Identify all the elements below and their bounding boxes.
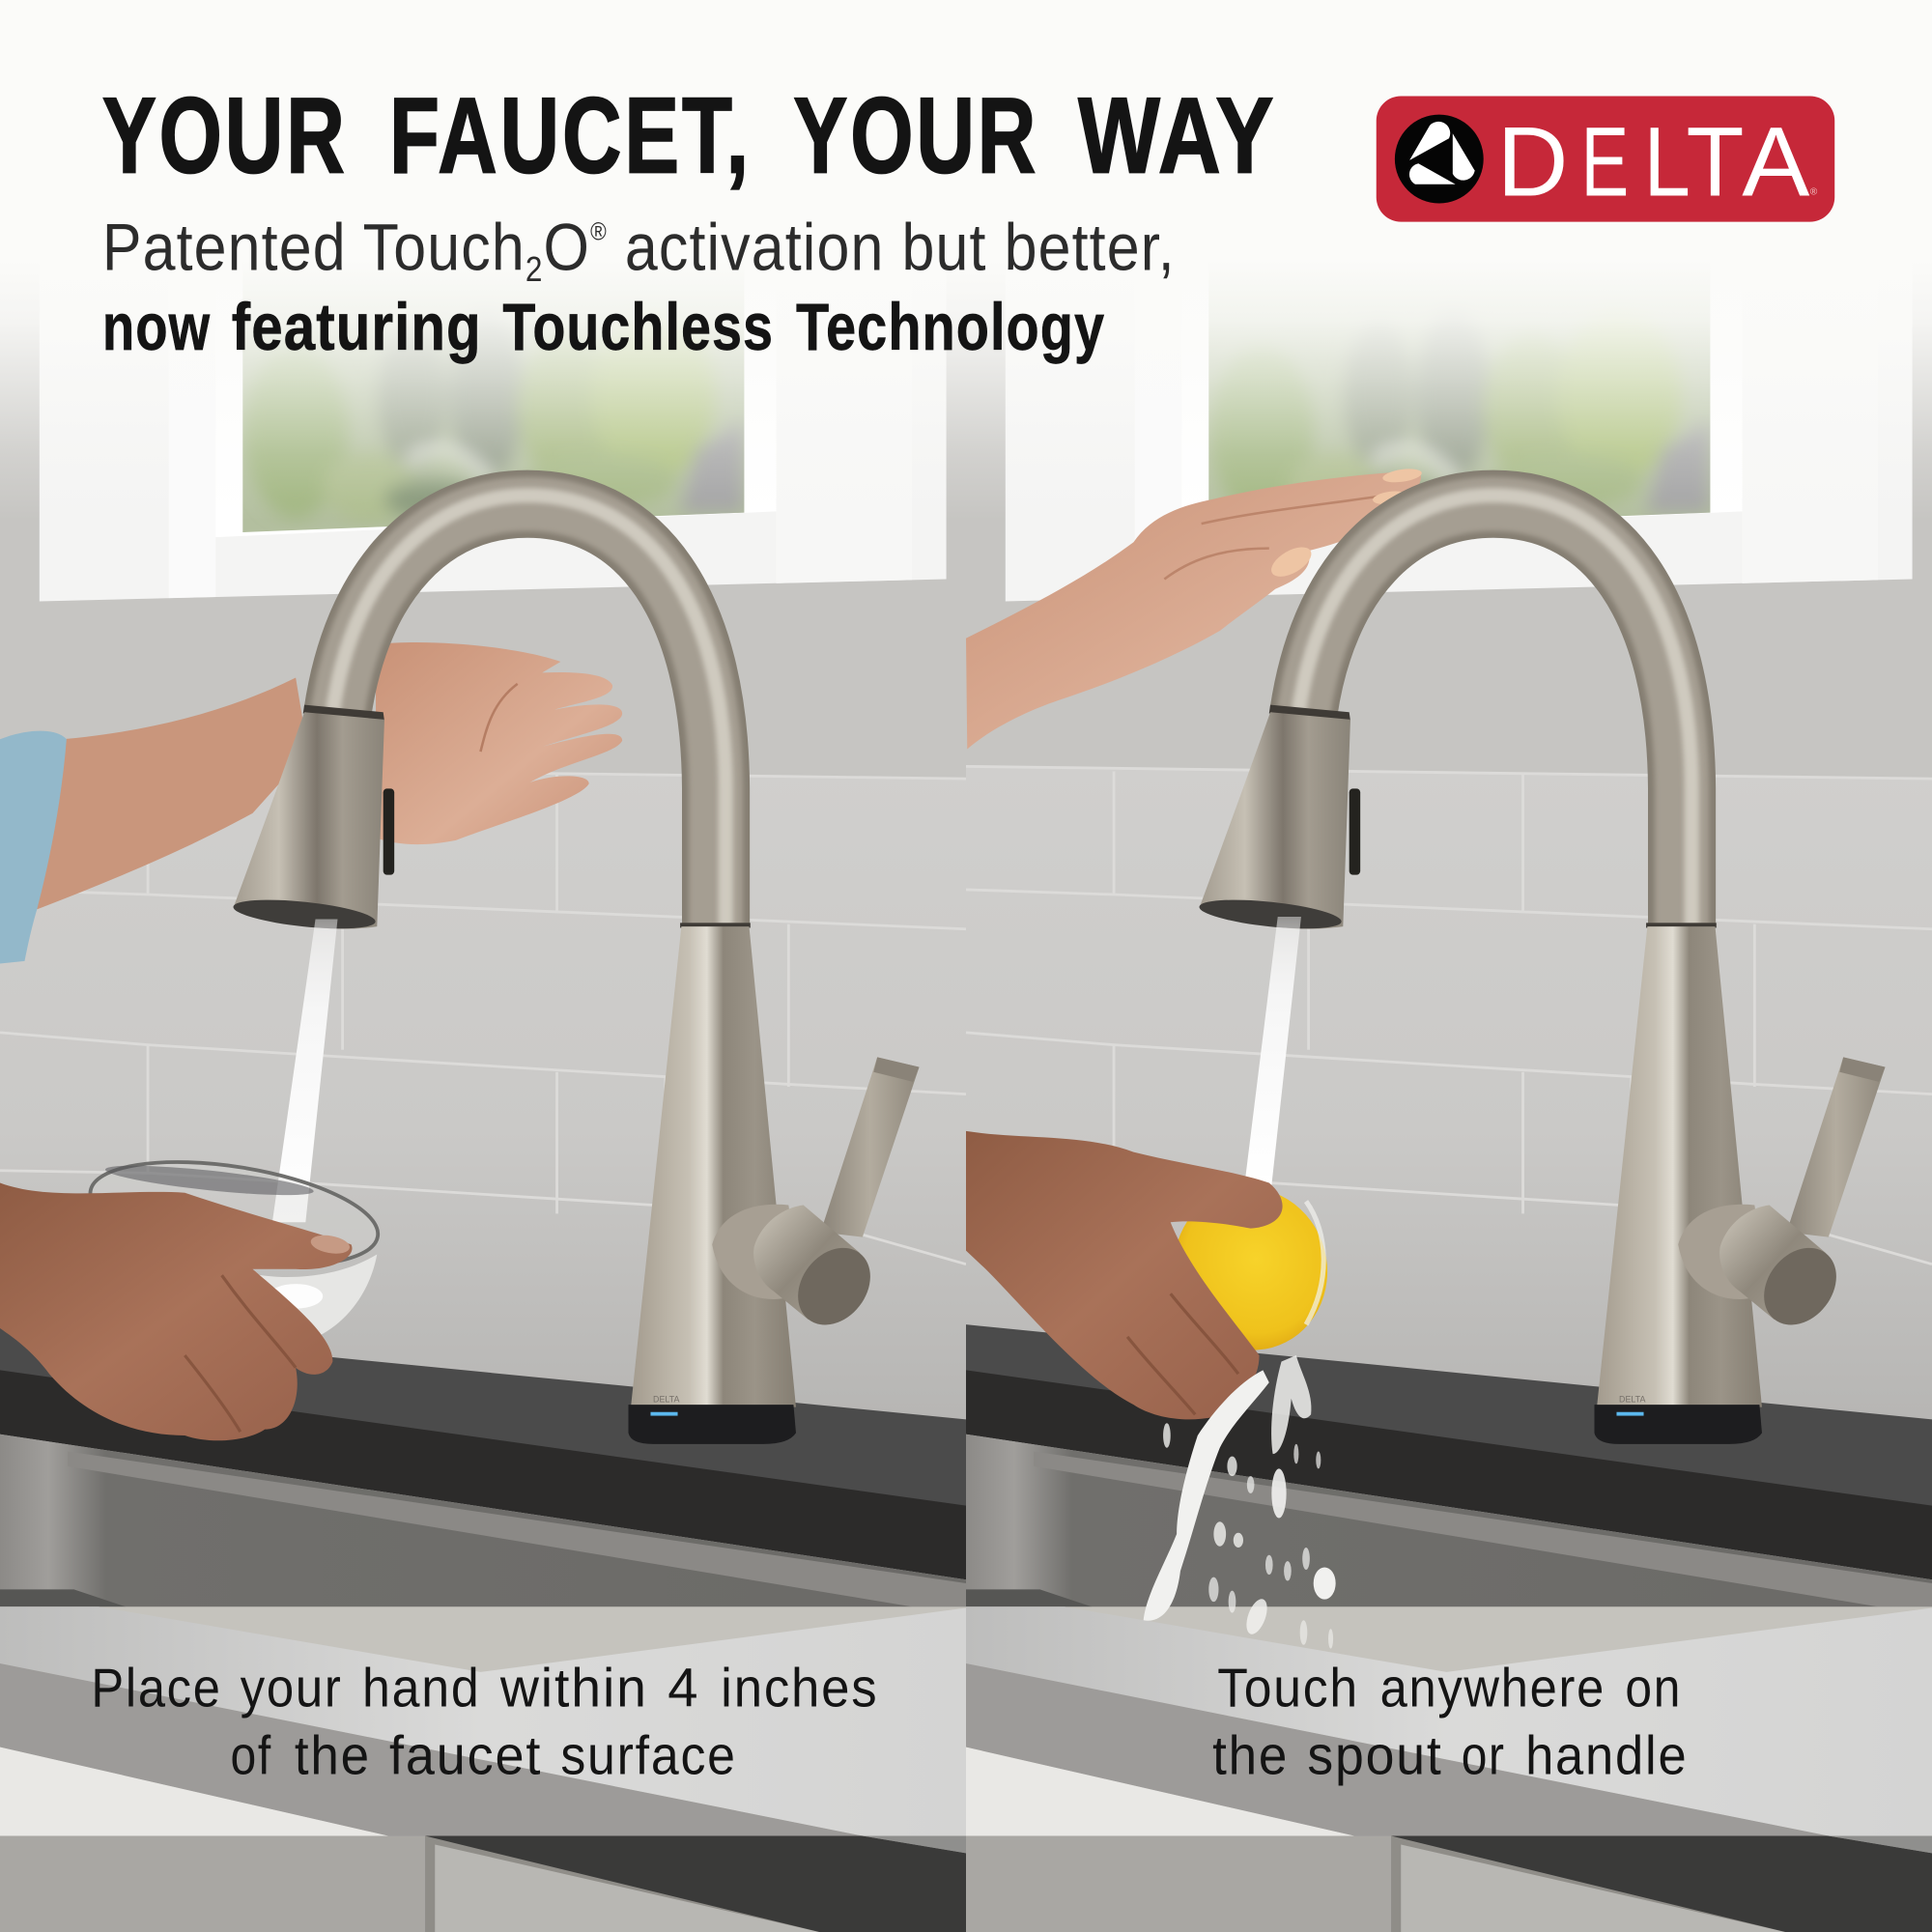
subtitle line 1: 2	[526, 250, 544, 289]
denim sleeve	[0, 731, 67, 963]
caption: right panel: or	[1462, 1725, 1506, 1786]
hand holding bowl	[0, 1182, 352, 1440]
caption: left panel: inches	[721, 1658, 878, 1719]
caption: left panel: the	[295, 1725, 371, 1786]
water stream	[272, 920, 337, 1222]
caption: right panel: anywhere	[1380, 1658, 1605, 1719]
logo wordmark: D	[1497, 106, 1568, 216]
splashing water	[1144, 1355, 1336, 1649]
logo wordmark: A	[1742, 106, 1809, 216]
lemon	[1155, 1171, 1346, 1368]
caption: left panel: 4	[668, 1658, 699, 1719]
faucet: right	[1198, 496, 1886, 1444]
subtitle line 1: O	[544, 210, 590, 284]
subtitle line 1: Patented Touch	[102, 210, 581, 284]
caption: right panel: spout	[1307, 1725, 1443, 1786]
subtitle line 2	[102, 290, 1105, 364]
subtitle line 2: now	[102, 290, 211, 364]
hand touching spout	[966, 467, 1423, 750]
title: WAY	[1078, 76, 1276, 196]
logo red badge	[1377, 96, 1834, 222]
glass bowl	[83, 1145, 385, 1338]
caption: left panel: Place	[91, 1658, 222, 1719]
title	[102, 76, 1276, 196]
caption: left panel: within	[499, 1658, 648, 1719]
caption: right panel: on	[1625, 1658, 1682, 1719]
caption: right panel: Touch	[1217, 1658, 1359, 1719]
logo wordmark: E	[1580, 106, 1629, 216]
title: YOUR	[102, 76, 348, 196]
faucet: left	[232, 496, 920, 1444]
top white fade	[0, 0, 1932, 542]
background scene: left panel	[0, 0, 966, 1932]
water stream	[1244, 917, 1301, 1185]
subtitle line 2: Technology	[796, 290, 1105, 364]
subtitle line 2: featuring	[232, 290, 482, 364]
panel: left hand-wave demonstration	[0, 496, 920, 1444]
caption: right panel	[1212, 1658, 1688, 1786]
caption: left panel: hand	[362, 1658, 480, 1719]
caption: right panel: handle	[1525, 1725, 1688, 1786]
subtitle line 1: activation but better,	[608, 210, 1176, 284]
caption: left panel: your	[241, 1658, 343, 1719]
caption: right panel: the	[1212, 1725, 1289, 1786]
caption: left panel: surface	[560, 1725, 737, 1786]
logo wordmark: T	[1687, 106, 1744, 216]
raised hand behind faucet	[376, 642, 622, 844]
forearm	[37, 678, 308, 909]
subtitle line 1: ®	[590, 219, 608, 246]
caption: left panel	[91, 1658, 878, 1786]
title: YOUR	[793, 76, 1038, 196]
subtitle line 2: Touchless	[502, 290, 774, 364]
title: FAUCET,	[389, 76, 752, 196]
caption: left panel: faucet	[389, 1725, 542, 1786]
caption: left panel: of	[231, 1725, 272, 1786]
background scene: right panel	[966, 0, 1932, 1932]
registered mark: ®	[1810, 187, 1818, 198]
hand holding lemon	[966, 1131, 1283, 1419]
panel: right touch demonstration	[966, 467, 1886, 1649]
logo wordmark: L	[1644, 106, 1690, 216]
logo: Delta	[1377, 96, 1834, 222]
logo wordmark	[1497, 106, 1809, 216]
logo emblem	[1395, 115, 1484, 203]
